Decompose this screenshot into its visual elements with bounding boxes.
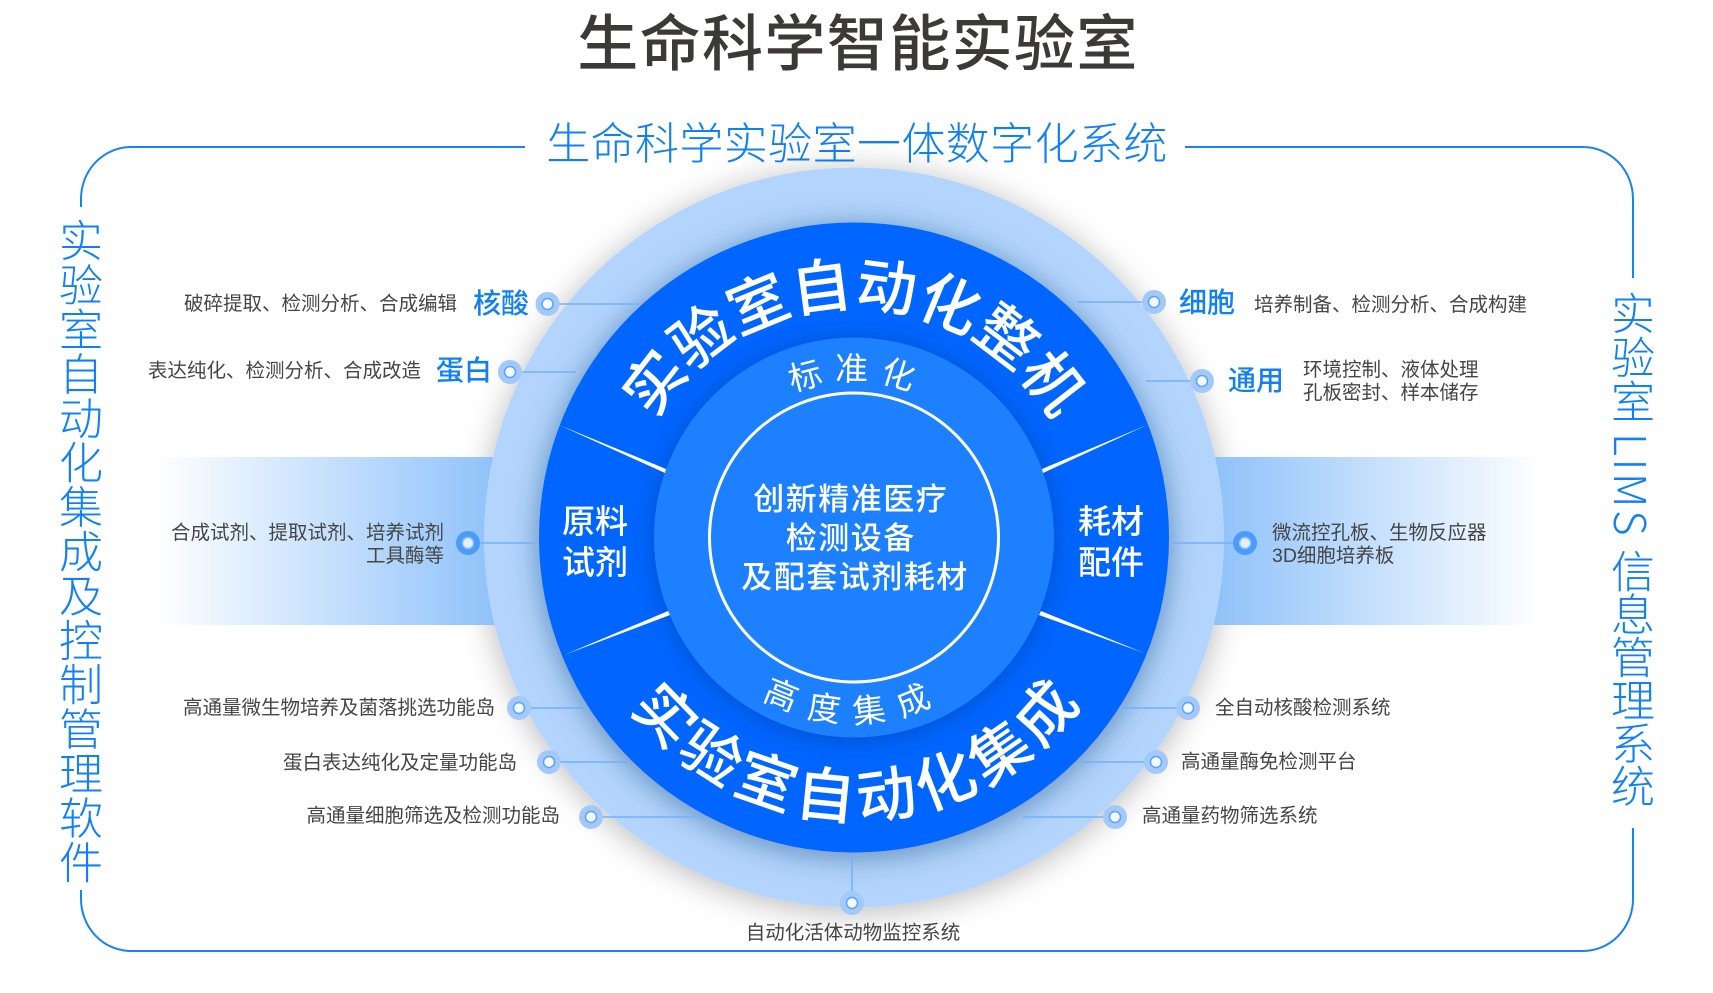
center text: 创新精准医疗 (753, 474, 948, 519)
outer light ring (484, 168, 1224, 908)
label: protein island: 蛋白表达纯化及定量功能岛 (283, 752, 517, 774)
inner ring (654, 338, 1054, 738)
segment: reagents: 原料 (562, 495, 628, 543)
segment: consumables: 配件 (1078, 536, 1144, 584)
right vertical label: 信息管理系统 (1601, 549, 1665, 807)
label: general (1228, 359, 1479, 404)
center circle outline (710, 393, 998, 682)
node: nucleic detection (1176, 696, 1200, 720)
right vertical label: LIMS (1601, 433, 1665, 538)
label: cell: 培养制备、检测分析、合成构建 (1254, 294, 1527, 316)
left vertical label: 实验室自动化集成及控制管理软件 (49, 218, 113, 884)
node: cell (1142, 290, 1166, 314)
label: drug screening: 高通量药物筛选系统 (1142, 805, 1318, 827)
label: consumables: 微流控孔板、生物反应器 (1272, 522, 1487, 544)
arc title: bottom: 实验室自动化集成 (630, 679, 1080, 824)
label: animal monitoring: 自动化活体动物监控系统 (746, 922, 960, 944)
label: nucleic acid (184, 282, 529, 322)
inner arc: integration: 高度集成 (764, 678, 931, 726)
center text: 及配套试剂耗材 (741, 552, 969, 597)
label: nucleic acid: 核酸 (473, 282, 529, 322)
node: cell screening (579, 805, 603, 829)
left gradient band (156, 457, 494, 625)
label: cell (1179, 281, 1527, 321)
inner arc: standardisation: 标准化 (788, 353, 916, 392)
node: protein island (537, 750, 561, 774)
label: nucleic acid: 破碎提取、检测分析、合成编辑 (184, 293, 457, 315)
label: general: 通用 (1228, 359, 1284, 399)
node: microbial (507, 696, 531, 720)
right vertical label: 实验室 (1601, 291, 1665, 423)
label: general: 孔板密封、样本储存 (1303, 382, 1479, 404)
node: consumables (1233, 531, 1257, 555)
node: reagents (456, 531, 480, 555)
leader lines (468, 302, 1245, 903)
dividers (559, 425, 1147, 655)
label: protein: 表达纯化、检测分析、合成改造 (148, 360, 421, 382)
segment: consumables: 耗材 (1078, 495, 1144, 543)
right vertical label (1601, 291, 1665, 807)
label: immunoassay: 高通量酶免检测平台 (1181, 751, 1357, 773)
label: protein (148, 349, 492, 389)
node: protein (498, 360, 522, 384)
label: consumables: 3D细胞培养板 (1272, 545, 1394, 567)
label: nucleic detection: 全自动核酸检测系统 (1215, 697, 1391, 719)
label: microbial: 高通量微生物培养及菌落挑选功能岛 (183, 697, 495, 719)
arc title: top: 实验室自动化整机 (621, 258, 1086, 420)
node: immunoassay (1144, 750, 1168, 774)
node: animal monitoring (840, 891, 864, 915)
label: reagents: 工具酶等 (366, 545, 444, 567)
label: cell screening: 高通量细胞筛选及检测功能岛 (306, 805, 560, 827)
label: reagents: 合成试剂、提取试剂、培养试剂 (171, 522, 444, 544)
main blue ring (539, 222, 1169, 852)
center text: 检测设备 (786, 513, 916, 558)
heading: digital system: 生命科学实验室一体数字化系统 (546, 108, 1168, 172)
segment: reagents: 试剂 (562, 536, 628, 584)
frame: rounded system border (81, 147, 1633, 951)
node: drug screening (1103, 805, 1127, 829)
node: general (1190, 369, 1214, 393)
label: cell: 细胞 (1179, 281, 1235, 321)
node: nucleic acid (536, 292, 560, 316)
label: protein: 蛋白 (436, 349, 492, 389)
label: general: 环境控制、液体处理 (1303, 359, 1479, 381)
right gradient band (1214, 457, 1543, 625)
